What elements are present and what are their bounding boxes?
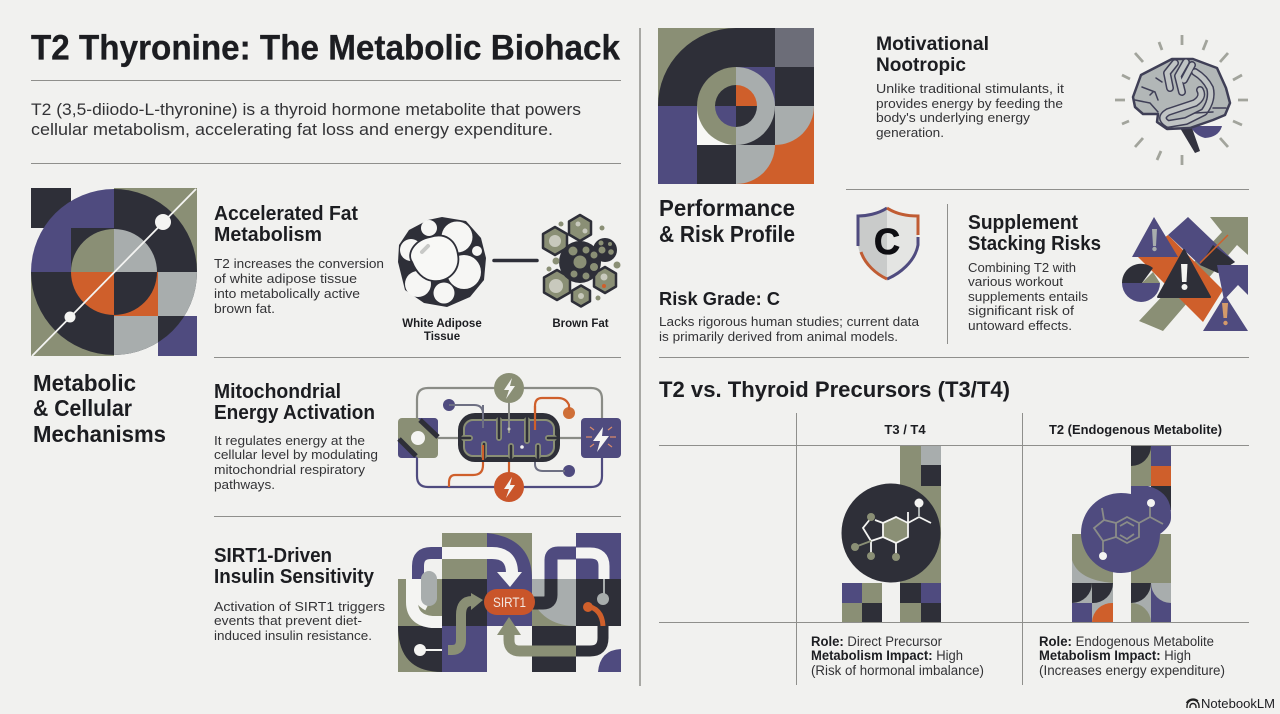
text block: motivational nootropic: Nootropic xyxy=(876,54,966,76)
text block: SIRT1-driven insulin sensitivity: induced insulin resistance. xyxy=(214,628,372,643)
text block: SIRT1-driven insulin sensitivity: Activation of SIRT1 triggers xyxy=(214,599,386,614)
text block: supplement stacking risks: significant risk of xyxy=(968,303,1074,318)
text block: supplement stacking risks: various workout xyxy=(968,274,1063,289)
text block: accelerated fat metabolism xyxy=(214,203,384,316)
label: white adipose tissue: Tissue xyxy=(424,331,460,343)
text block: mitochondrial energy activation: mitochondrial respiratory xyxy=(214,462,366,477)
table cell: T2 role: (Increases energy expenditure) xyxy=(1039,663,1225,678)
heading: metabolic and cellular mechanisms: & Cellular xyxy=(33,395,132,421)
diagram: SIRT1 pathway: SIRT1 xyxy=(493,594,526,610)
diagram: mitochondrion energy circuit xyxy=(398,373,621,502)
text block: mitochondrial energy activation: It regulates energy at the xyxy=(214,433,365,448)
heading: performance and risk profile: Performance xyxy=(659,195,795,221)
intro paragraph: cellular metabolism, accelerating fat loss and energy expenditure. xyxy=(31,121,553,139)
diagram: SIRT1 pathway xyxy=(398,533,621,672)
icon: white adipose tissue xyxy=(398,217,486,307)
illustration: T3/T4 molecule xyxy=(842,446,941,622)
text block: SIRT1-driven insulin sensitivity: events that prevent diet- xyxy=(214,613,362,628)
text block: mitochondrial energy activation: Energy Activation xyxy=(214,402,375,424)
text block: risk grade xyxy=(659,289,920,344)
icon: risk grade shield: C xyxy=(874,221,900,262)
label: white adipose tissue xyxy=(402,318,482,343)
icon: stacking warning triangles xyxy=(1122,217,1248,331)
text block: accelerated fat metabolism: of white adipose tissue xyxy=(214,271,357,286)
NotebookLM logo: NotebookLM xyxy=(1201,697,1275,711)
text block: mitochondrial energy activation: pathways. xyxy=(214,477,275,492)
text block: SIRT1-driven insulin sensitivity: Insulin Sensitivity xyxy=(214,566,375,588)
text block: risk grade: is primarily derived from animal models. xyxy=(659,329,898,344)
label: brown fat: Brown Fat xyxy=(552,318,609,330)
text block: risk grade: Risk Grade: C xyxy=(659,289,780,309)
icon: geometric performance art xyxy=(658,28,814,184)
text block: supplement stacking risks: Combining T2 with xyxy=(968,260,1076,275)
text block: supplement stacking risks: Supplement xyxy=(968,212,1078,234)
text block: mitochondrial energy activation xyxy=(214,381,378,492)
text block: accelerated fat metabolism: brown fat. xyxy=(214,301,275,316)
heading: performance and risk profile xyxy=(659,195,795,247)
heading: T2 vs thyroid precursors: T2 vs. Thyroid Precursors (T3/T4) xyxy=(659,377,1010,402)
text block: motivational nootropic: Motivational xyxy=(876,33,989,55)
text block: accelerated fat metabolism: T2 increases the conversion xyxy=(214,256,384,271)
illustration: T2 molecule xyxy=(1072,446,1171,622)
table cell: T2 role xyxy=(1039,634,1225,678)
text block: supplement stacking risks xyxy=(968,212,1101,333)
icon: brain with rays xyxy=(1115,35,1248,165)
icon: risk grade shield xyxy=(858,208,918,279)
table cell: T3/T4 role: Role: Direct Precursor xyxy=(811,634,942,649)
text block: supplement stacking risks: untoward effects. xyxy=(968,318,1072,333)
text block: motivational nootropic xyxy=(876,33,1064,140)
text block: supplement stacking risks: Stacking Risks xyxy=(968,233,1101,255)
label: white adipose tissue: White Adipose xyxy=(402,318,482,330)
text block: motivational nootropic: provides energy by feeding the xyxy=(876,96,1063,111)
icon: brown fat xyxy=(543,215,620,306)
text block: supplement stacking risks: supplements entails xyxy=(968,289,1089,304)
table cell: T3/T4 role xyxy=(811,634,984,678)
text block: accelerated fat metabolism: into metabolically active xyxy=(214,286,360,301)
text block: accelerated fat metabolism: Metabolism xyxy=(214,224,322,246)
text block: accelerated fat metabolism: Accelerated Fat xyxy=(214,203,358,225)
table header: T2 endogenous metabolite: T2 (Endogenous Metabolite) xyxy=(1049,422,1222,437)
text block: motivational nootropic: generation. xyxy=(876,125,944,140)
table cell: T2 role: Metabolism Impact: High xyxy=(1039,648,1191,663)
heading: performance and risk profile: & Risk Profile xyxy=(659,221,795,247)
heading: metabolic and cellular mechanisms: Mechanisms xyxy=(33,421,166,447)
table header: T3/T4: T3 / T4 xyxy=(884,422,926,437)
intro paragraph xyxy=(31,101,581,139)
icon: metabolic geometric art xyxy=(31,188,197,356)
text block: mitochondrial energy activation: cellular level by modulating xyxy=(214,447,378,462)
text block: SIRT1-driven insulin sensitivity xyxy=(214,545,386,643)
heading: metabolic and cellular mechanisms xyxy=(33,370,166,447)
connector between fat types xyxy=(494,259,537,262)
table cell: T3/T4 role: (Risk of hormonal imbalance) xyxy=(811,663,984,678)
text block: risk grade: Lacks rigorous human studies; current data xyxy=(659,314,920,329)
title: T2 Thyronine: The Metabolic Biohack xyxy=(31,28,620,68)
text block: motivational nootropic: Unlike traditional stimulants, it xyxy=(876,81,1064,96)
text block: mitochondrial energy activation: Mitochondrial xyxy=(214,381,341,403)
table cell: T3/T4 role: Metabolism Impact: High xyxy=(811,648,963,663)
table cell: T2 role: Role: Endogenous Metabolite xyxy=(1039,634,1214,649)
text block: motivational nootropic: body's underlying energy xyxy=(876,110,1031,125)
text block: SIRT1-driven insulin sensitivity: SIRT1-Driven xyxy=(214,545,332,567)
heading: metabolic and cellular mechanisms: Metabolic xyxy=(33,370,136,396)
intro paragraph: T2 (3,5-diiodo-L-thyronine) is a thyroid hormone metabolite that powers xyxy=(31,101,581,119)
